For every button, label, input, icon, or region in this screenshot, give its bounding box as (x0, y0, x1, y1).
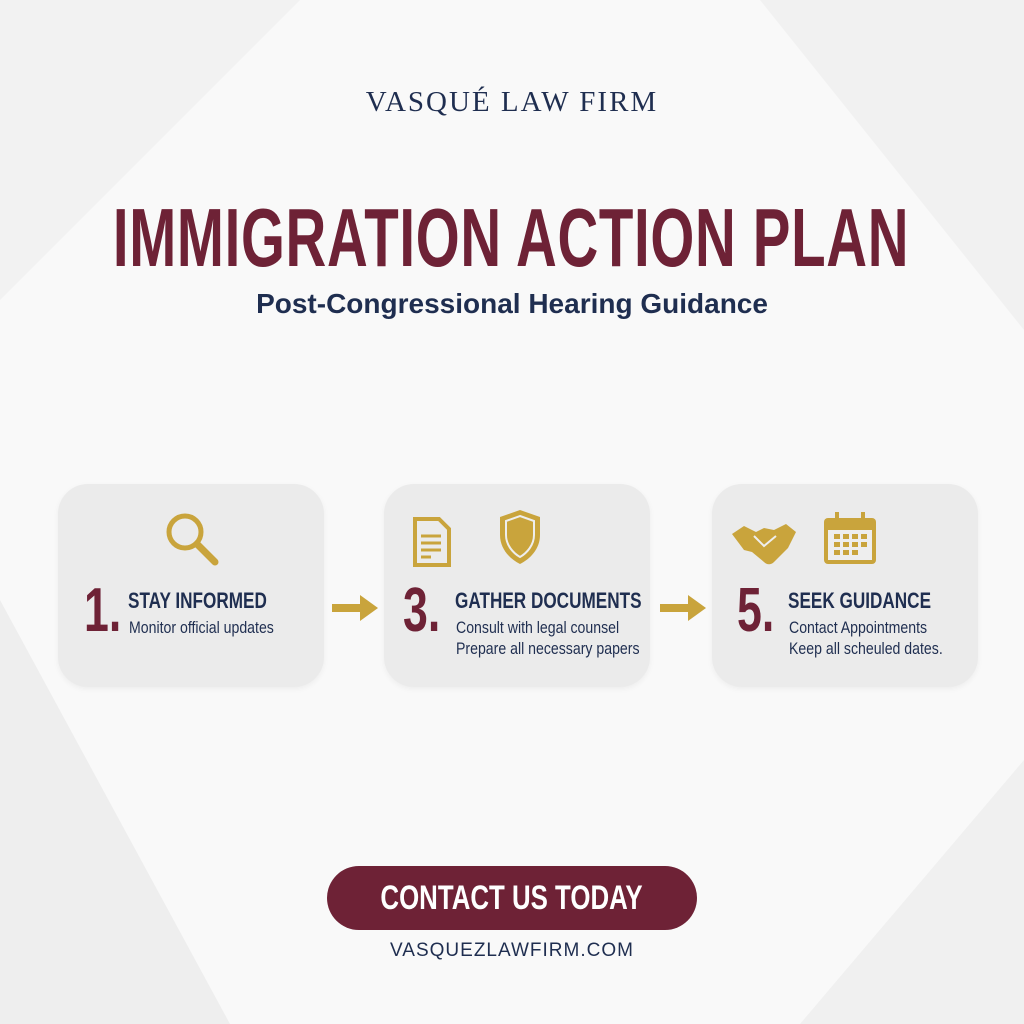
icon: magnifier (166, 514, 218, 566)
firm name: VASQUÉ LAW FIRM (366, 86, 658, 118)
button: contact us (327, 866, 697, 930)
heading 1: STAY INFORMED (128, 588, 267, 613)
heading 3: GATHER DOCUMENTS (455, 588, 642, 613)
body 3: Prepare all necessary papers (456, 639, 640, 658)
body 5: Contact Appointments (789, 618, 927, 637)
panel: step 1 (58, 484, 324, 687)
number 3: 3. (403, 576, 440, 645)
heading 5: SEEK GUIDANCE (788, 588, 931, 613)
button: contact us: CONTACT US TODAY (381, 879, 643, 917)
panel: step 5 (712, 484, 978, 687)
subtitle: Post-Congressional Hearing Guidance (256, 288, 768, 319)
icon: document (413, 517, 451, 567)
body 3 (456, 618, 640, 658)
body 3: Consult with legal counsel (456, 618, 619, 637)
body 5 (789, 618, 943, 658)
website url: VASQUEZLAWFIRM.COM (390, 940, 634, 961)
body 5: Keep all scheuled dates. (789, 639, 943, 658)
title: IMMIGRATION ACTION PLAN (113, 191, 909, 284)
arrow 2 (660, 595, 706, 621)
icon: shield (500, 510, 540, 564)
arrow 1 (332, 595, 378, 621)
number 1: 1. (84, 576, 121, 645)
body 1: Monitor official updates (129, 618, 274, 637)
icon: handshake (732, 524, 796, 564)
number 5: 5. (737, 576, 774, 645)
panel: step 3 (384, 484, 650, 687)
icon: calendar (824, 512, 876, 564)
